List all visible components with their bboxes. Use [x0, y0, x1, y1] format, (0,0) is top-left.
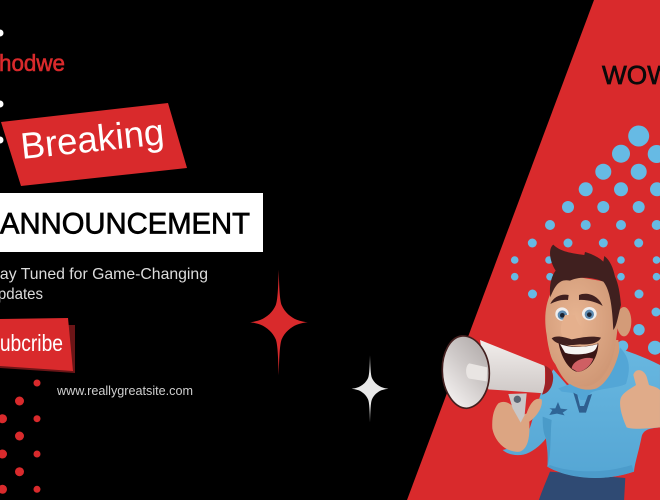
thumbs-up hand [620, 370, 660, 429]
tongue [572, 358, 593, 372]
trousers [538, 472, 625, 500]
teeth [560, 344, 598, 354]
nose [561, 315, 583, 341]
subtitle [0, 266, 208, 303]
website: www.reallygreatsite.com [56, 384, 193, 398]
announcement banner [0, 193, 263, 252]
icon: white star [352, 355, 388, 422]
megaphone [442, 336, 553, 408]
white dots [0, 30, 4, 144]
handle button [514, 396, 521, 403]
ear [617, 307, 631, 336]
eyebrows [550, 294, 603, 306]
megaphone bell [442, 336, 489, 408]
panel: red diagonal [407, 0, 660, 500]
mouth [558, 342, 598, 372]
hand holding handle [492, 399, 542, 452]
blue dots [511, 126, 660, 355]
torso shade [547, 465, 634, 478]
brand name: hodwe [0, 50, 65, 76]
sleeve shade [543, 417, 552, 467]
red dots [0, 380, 40, 494]
collar placket [573, 393, 592, 413]
megaphone band [542, 365, 553, 395]
breaking tag [1, 103, 187, 186]
megaphone driver [466, 363, 487, 381]
sleeve and torso [503, 348, 660, 478]
megaphone cone [480, 340, 545, 393]
neck and jaw [548, 340, 619, 392]
collar [558, 347, 629, 400]
breaking tag: Breaking [19, 111, 166, 167]
illustration: man with megaphone [442, 245, 660, 500]
hair [550, 245, 621, 330]
megaphone handle [508, 393, 527, 423]
shirt star [549, 402, 568, 415]
subscribe button [0, 318, 75, 373]
icon: red star [250, 270, 308, 375]
mustache [552, 336, 601, 345]
head [545, 273, 618, 387]
eyes [555, 307, 597, 321]
announcement banner: ANNOUNCEMENT [0, 208, 250, 240]
